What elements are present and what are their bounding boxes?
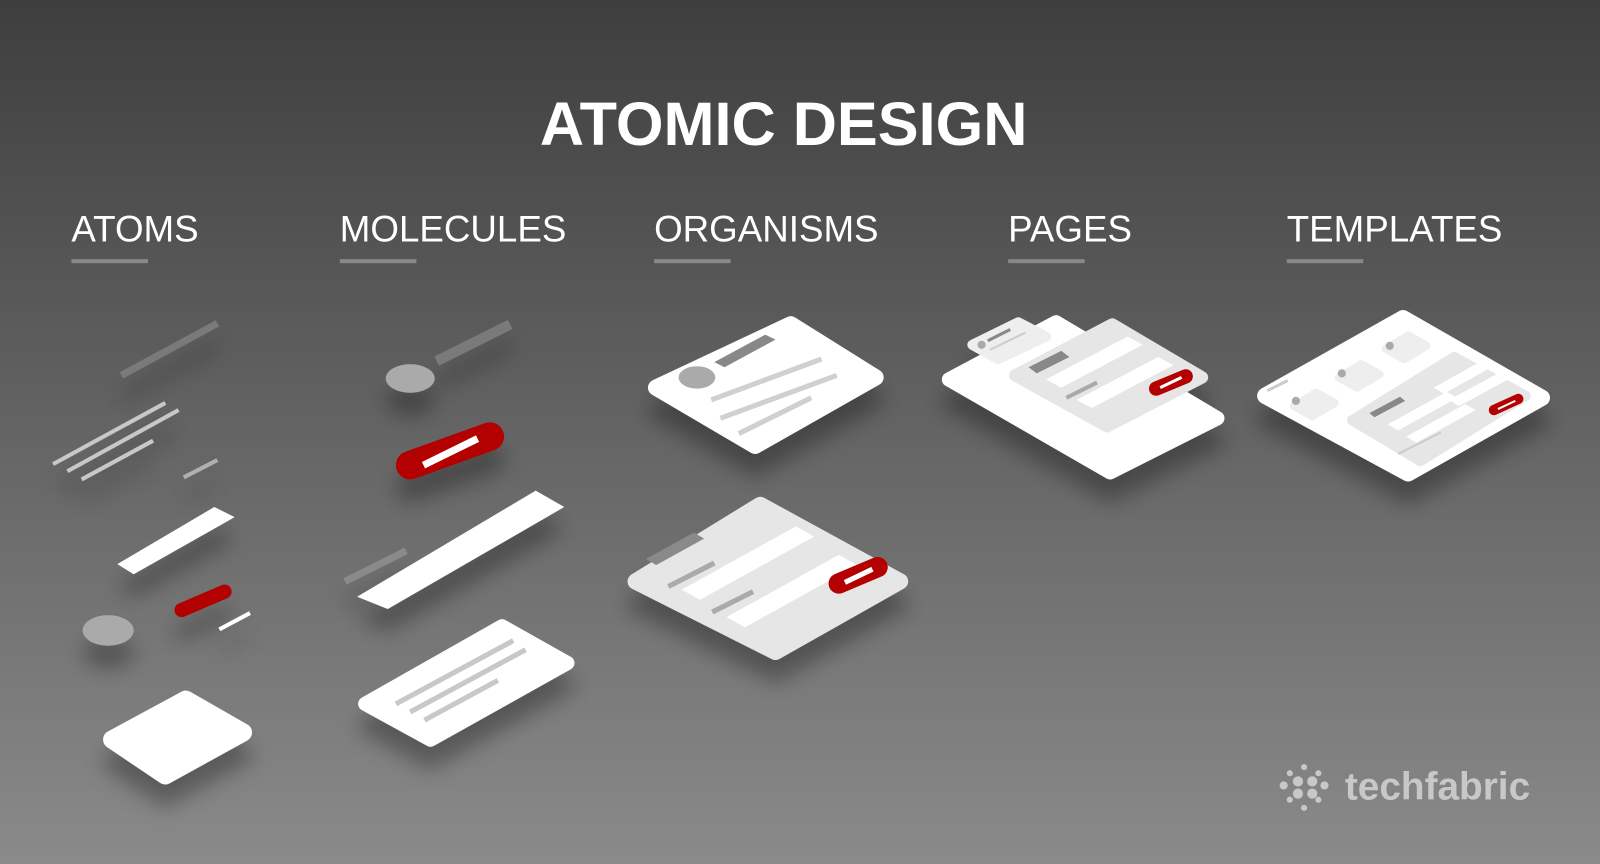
panel: organisms card 2 bbox=[636, 505, 900, 652]
panel: atoms bbox=[53, 323, 250, 775]
logo: techfabric bbox=[1280, 764, 1530, 811]
heading: templates: TEMPLATES bbox=[1287, 209, 1502, 250]
heading: organisms: ORGANISMS bbox=[654, 209, 879, 250]
panel: templates bbox=[1265, 318, 1542, 473]
title: ATOMIC DESIGN bbox=[540, 90, 1027, 158]
logo: techfabric: techfabric bbox=[1345, 766, 1530, 809]
panel: organisms card 1 bbox=[656, 324, 876, 446]
heading: pages: PAGES bbox=[1008, 209, 1132, 250]
panel: molecules bbox=[345, 324, 567, 740]
panel: pages bbox=[949, 322, 1217, 472]
heading: molecules: MOLECULES bbox=[340, 209, 566, 250]
heading: atoms: ATOMS bbox=[71, 209, 199, 250]
